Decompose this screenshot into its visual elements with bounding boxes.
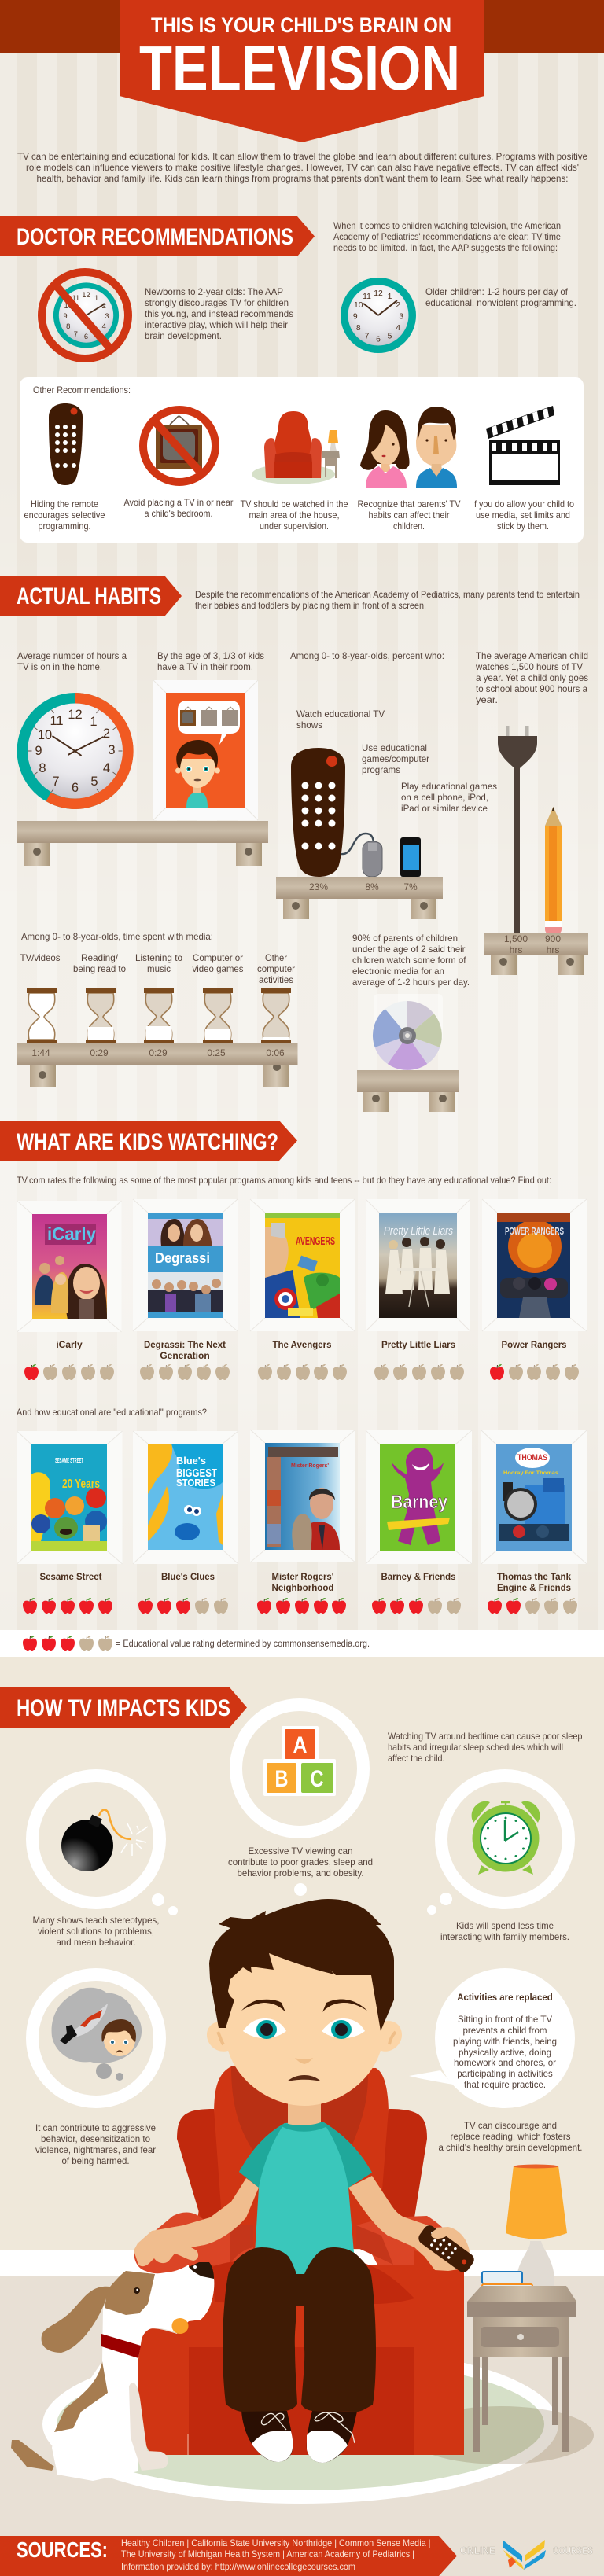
icon: clock: 12 [374,289,383,298]
text: 1500 hours: to school about 900 hours a [476,683,587,694]
bubble body: participating in activities [457,2068,553,2079]
shelf 4 with time labels: 0:25 [207,1047,226,1058]
text: excessive viewing: contribute to poor grades, sleep and [228,1857,373,1868]
text: stereotypes: Many shows teach stereotypes, [33,1915,159,1926]
text: 90 percent of parents: children watch some form of [352,955,466,966]
poster: Pretty Little Liars [366,1199,470,1331]
intro text: role models can influence viewers to make positive lifestyle changes. However, TV can can also have negative effects. TV can affect kids' [26,162,579,173]
text: excessive viewing: Excessive TV viewing can [249,1846,352,1857]
bubble body: prevents a child from [462,2025,547,2036]
poster: Degrassi: Degrassi [155,1250,210,1266]
poster: Thomas [481,1430,587,1564]
icon: crossed-out clock [42,272,128,359]
captions: use media, set limits and [476,510,570,521]
icon: crossed-out clock: 5 [94,329,98,338]
thought bubble: ABC blocks: A [293,1732,307,1758]
big clock: 6 [72,781,79,795]
big clock: 10 [38,728,52,742]
bar: phone 7 percent [400,837,421,877]
show titles row 1 [56,1339,567,1361]
text: newborns: Newborns to 2-year olds: The AAP [145,286,283,297]
text: 90 percent of parents: under the age of 2 said their [352,944,466,955]
text: educational programs: And how educational are "educational" programs? [17,1407,207,1418]
show titles row 1: Pretty Little Liars [381,1339,455,1350]
big clock: 2 [103,727,110,741]
show titles row 2: Neighborhood [272,1582,333,1593]
text: reading: a child's healthy brain development. [439,2142,582,2153]
hourglass column labels: Listening to [135,952,182,963]
apple ratings row 1 [24,1364,579,1380]
shirt [239,2122,372,2280]
fingers over remote [430,2226,451,2240]
shelf 4 with time labels: 1:44 [31,1047,50,1058]
panel heading: Other Recommendations: [33,385,131,396]
icon: parents [360,407,457,488]
text: stereotypes: violent solutions to problems, [38,1926,154,1937]
panel: other recommendations [20,377,584,543]
text: AAP recommendations: needs to be limited. In fact, the AAP suggests the following: [333,242,558,253]
hourglass: music [144,988,174,1044]
text: aggressive behavior: behavior, desensitization to [41,2133,150,2144]
heading: doctor recommendations [0,216,315,256]
hourglass column labels [20,952,295,985]
logo: online courses [460,2540,593,2570]
icon: clock: 3 [399,312,403,321]
text: watch educational TV: shows [296,719,322,730]
bubble body [453,2014,557,2090]
icon: crossed-out clock: 10 [64,301,72,310]
hourglass column labels: TV/videos [20,952,60,963]
big clock: 7 [52,775,60,789]
text: time spent with media: Among 0- to 8-year-olds, time spent with media: [21,931,213,942]
heading: actual habits: ACTUAL HABITS [17,583,161,609]
bar: power cord 1500 hours [498,726,537,933]
show titles row 2: Mister Rogers' [272,1571,334,1582]
icon: clock [341,278,416,353]
text: stereotypes: and mean behavior. [57,1937,135,1948]
icon: clock: 2 [396,301,400,310]
hourglass column labels: being read to [73,963,126,974]
bubble body: playing with friends, being [453,2036,557,2047]
text: excessive viewing: behavior problems, and obesity. [238,1868,363,1879]
text: bedtime: affect the child. [388,1753,445,1764]
text: newborns: strongly discourages TV for children [145,297,289,308]
captions: TV should be watched in the [241,499,348,510]
poster: Pretty Little Liars: Pretty Little Liars [384,1224,453,1238]
text: AAP recommendations: When it comes to children watching television, the American [333,220,561,231]
legend: apple rating [0,1630,604,1657]
hand-held remote [416,2223,477,2275]
big clock: 9 [35,744,42,758]
text: habits intro [195,589,580,611]
captions: programming. [38,521,91,532]
big clock [17,693,134,809]
big clock: 8 [39,761,46,775]
sources banner [0,2536,457,2576]
shelf 3 with hours labels: hrs [547,944,559,955]
hourglass column labels: video games [192,963,244,974]
text: educational games: programs [362,764,400,775]
big clock: 3 [108,743,116,757]
shelf 4 with time labels: 0:29 [149,1047,168,1058]
icon: remote [49,403,83,485]
intro text: health, behavior and family life. Kids can learn things from programs that parents don't want them to learn. See what really happens: [36,173,568,184]
show titles row 1: Generation [160,1350,210,1361]
text: play educational games: iPad or similar device [401,803,488,814]
poster: Thomas: THOMAS [517,1453,547,1463]
logo: online courses: COURSES [553,2545,593,2556]
text: play educational games: Play educational games [401,781,497,792]
text: percent who: Among 0- to 8-year-olds, percent who: [290,650,444,661]
shelf 4 with time labels: 0:29 [90,1047,109,1058]
arms [134,2176,470,2271]
text: popular programs: TV.com rates the following as some of the most popular programs among kids and teens -- but do they have any educational value? Find out: [17,1175,551,1186]
text: average hours: Average number of hours a [17,650,127,661]
text: aggressive behavior: of being harmed. [61,2155,129,2166]
icon: armchair in living area [252,411,340,484]
icon: clapboard [486,406,560,485]
illustration: boy on the chair [134,1899,477,2463]
speech bubble: activities are replaced [409,1968,575,2108]
text: family interaction: Kids will spend less time [456,1920,554,1931]
bar: pencil 900 hours [545,807,562,933]
lamp [506,2164,567,2294]
show titles row 1: Degrassi: The Next [144,1339,226,1350]
thought bubble: ABC blocks [236,1705,363,1896]
text: bedtime: Watching TV around bedtime can cause poor sleep [388,1731,583,1742]
illustration: side table with lamp and books [408,2164,594,2464]
sources banner: Information provided by: http://www.onlinecollegecourses.com [121,2561,355,2572]
text: newborns: interactive play, which will help their [145,319,288,330]
hourglass column labels: Reading/ [81,952,119,963]
text: AAP recommendations [333,220,561,253]
child [175,740,220,808]
hourglass: reading [86,988,116,1044]
text: family interaction: interacting with family members. [440,1931,569,1942]
text: 90 percent of parents: 90% of parents of children [352,933,458,944]
captions: If you do allow your child to [472,499,574,510]
show titles row 2: Thomas the Tank [497,1571,571,1582]
poster: The Avengers: AVENGERS [296,1235,335,1248]
speech bubble [178,701,240,745]
shelf 3 with hours labels: hrs [510,944,522,955]
icon: clock: 7 [365,333,370,341]
thought bubble: alarm clock [427,1776,569,1915]
icon: clock: 1 [388,293,392,301]
poster: Sesame Street: SESAME STREET [55,1457,83,1464]
captions: main area of the house, [249,510,340,521]
big clock: 1 [90,715,98,729]
text: reading: TV can discourage and [464,2120,557,2131]
poster: The Avengers [250,1199,355,1331]
hourglass column labels: music [147,963,171,974]
poster: Mister Rogers: Mister Rogers' [291,1463,329,1469]
rug [42,2345,558,2504]
icon: clock: 11 [363,293,371,301]
text: watch educational TV [296,708,385,730]
icon: clock: 9 [353,312,358,321]
text: 1500 hours: year. [476,694,498,705]
text: aggressive behavior [35,2122,156,2166]
heading: how TV impacts kids: HOW TV IMPACTS KIDS [17,1695,230,1721]
apple ratings row 2 [23,1598,577,1614]
text: family interaction [440,1920,569,1942]
text: watch educational TV: Watch educational TV [296,708,385,719]
show titles row 2: Sesame Street [39,1571,102,1582]
icon: crossed-out clock: 3 [105,311,109,320]
bubble body: homework and chores, or [454,2057,556,2068]
text: aggressive behavior: It can contribute to aggressive [35,2122,156,2133]
head [207,1899,402,2106]
illustration: dog [11,2262,214,2481]
icon: crossed-out clock: 11 [72,293,79,302]
text: older children: Older children: 1-2 hours per day of [425,286,569,297]
shelf 3 with hours labels: 900 [545,933,561,944]
icon: no TV [143,410,215,482]
poster: Blue's Clues [133,1431,238,1564]
text: newborns: this young, and instead recommends [145,308,293,319]
show titles row 2 [39,1571,571,1593]
big clock: 5 [90,775,98,789]
text: older children: educational, nonviolent programming. [425,297,576,308]
sources banner: Healthy Children | California State University Northridge | Common Sense Media | [121,2537,431,2548]
icon: crossed-out clock: 4 [102,322,106,330]
icon: crossed-out clock: 9 [63,311,68,320]
text: habits intro: their babies and toddlers by placing them in front of a screen. [195,600,426,611]
poster: Blue's Clues: BIGGEST [176,1466,217,1480]
poster: Blue's Clues: Blue's [176,1455,206,1466]
hourglass: TV/videos [27,988,57,1044]
text: reading [439,2120,582,2153]
text: average hours: TV is on in the home. [17,661,102,672]
thought bubble: ABC blocks: B [275,1766,288,1792]
pants and shoes [223,2247,376,2463]
text: 1500 hours: watches 1,500 hours of TV [475,661,583,672]
text: bedtime: habits and irregular sleep schedules which will [388,1742,563,1753]
icon: disc [373,994,443,1070]
text: reading: replace reading, which fosters [450,2131,571,2142]
poster: Mister Rogers [250,1430,355,1562]
poster: iCarly [17,1201,121,1332]
text: educational games [362,742,429,775]
poster: Barney: Barney [391,1492,448,1513]
illustration: armchair [134,2066,464,2455]
icon: crossed-out clock: 6 [84,332,88,340]
heading: how TV impacts kids [0,1687,247,1728]
icon: clock: 5 [388,333,392,341]
captions [24,497,574,532]
poster: Barney [366,1430,472,1564]
wall base and floor [0,2250,604,2576]
title line 2: TELEVISION [139,33,460,103]
show titles row 1: The Avengers [272,1339,332,1350]
text: 90 percent of parents: electronic media for an [352,966,444,977]
captions: stick by them. [497,521,549,532]
text: 1500 hours: a year. Yet a child only goes [476,672,588,683]
title banner [0,0,604,142]
show titles row 2: Blue's Clues [161,1571,215,1582]
text: play educational games [401,781,497,814]
heading: what are kids watching [0,1121,297,1161]
heading: doctor recommendations: DOCTOR RECOMMENDATIONS [17,224,293,250]
hourglass column labels: activities [259,974,293,985]
show titles row 1: Power Rangers [502,1339,567,1350]
show titles row 1: iCarly [56,1339,83,1350]
poster: Sesame Street: 20 Years [62,1478,100,1491]
icon: clock: 6 [376,335,381,344]
hourglass: other activities [261,988,291,1044]
sources banner: The University of Michigan Health System | American Academy of Pediatrics | [121,2548,414,2559]
shelf 2 with percent labels: 7% [403,881,418,892]
text: 1500 hours [475,650,588,705]
text: AAP recommendations: Academy of Pediatrics' recommendations are clear: TV time [333,231,561,242]
bubble body: Sitting in front of the TV [458,2014,552,2025]
text: 90 percent of parents [352,933,470,988]
icon: crossed-out clock: 8 [66,322,70,330]
text: newborns: brain development. [145,330,222,341]
text: aggressive behavior: violence, nightmares, and fear [35,2144,156,2155]
icon: crossed-out clock: 12 [82,290,90,299]
thought bubble: knife nightmare [32,1974,160,2102]
captions: children. [393,521,425,532]
captions: encourages selective [24,510,105,521]
poster: Degrassi [133,1199,238,1331]
text: TV in room: By the age of 3, 1/3 of kids [157,650,264,661]
text: TV in room: have a TV in their room. [157,661,253,672]
icon: crossed-out clock: 2 [102,301,106,310]
text: play educational games: on a cell phone, iPod, [401,792,488,803]
big clock: 12 [68,708,83,722]
logo: online courses: ONLINE [460,2545,495,2556]
poster: Power Rangers [482,1199,587,1331]
text: average hours [17,650,127,672]
shelf 1 [17,821,268,866]
text: TV in room [157,650,264,672]
shelf 2 with percent labels: 23% [309,881,328,892]
heading: what are kids watching: WHAT ARE KIDS WATCHING? [17,1129,278,1155]
poster: Blue's Clues: STORIES [176,1477,215,1489]
poster: Power Rangers: POWER RANGERS [505,1225,564,1237]
poster: Thomas: Hooray For Thomas [503,1471,559,1476]
shelf 4 with time labels [17,1043,297,1087]
text: excessive viewing [228,1846,373,1879]
thought bubble: ABC blocks: C [310,1766,324,1792]
show titles row 2: Barney & Friends [381,1571,456,1582]
captions: Avoid placing a TV in or near [124,497,233,508]
hourglass column labels: computer [257,963,295,974]
text: newborns [145,286,293,341]
neck [282,2099,327,2132]
shelf 2 with percent labels: 8% [365,881,379,892]
bar: mouse 8 percent [341,834,382,877]
bubble body: that require practice. [464,2079,546,2090]
poster: iCarly: iCarly [47,1224,96,1244]
books [482,2272,532,2296]
icon: clock: 8 [356,324,361,333]
icon: crossed-out clock: 7 [74,329,78,338]
big clock: 11 [50,714,64,728]
text: stereotypes [33,1915,159,1948]
framed picture: child with TV [153,680,258,820]
text: 1500 hours: The average American child [476,650,588,661]
hourglass column labels: Computer or [193,952,243,963]
title line 1: THIS IS YOUR CHILD'S BRAIN ON [151,13,451,37]
icon: clock: 4 [396,324,400,333]
icon: crossed-out clock: 1 [94,293,98,302]
shelf 5 [357,1070,459,1112]
heading: actual habits [0,576,182,616]
text: older children [425,286,576,308]
shelf 3 with hours labels [484,933,588,975]
shelf 2 with percent labels [276,877,443,919]
captions: Recognize that parents' TV [357,499,461,510]
text: bedtime [388,1731,583,1764]
text: educational games: games/computer [362,753,429,764]
text: 90 percent of parents: average of 1-2 hours per day. [352,977,470,988]
shelf 4 with time labels: 0:06 [266,1047,285,1058]
legend: apple rating: = Educational value rating determined by commonsensemedia.org. [116,1638,370,1649]
sources banner: SOURCES: [17,2537,108,2562]
intro text: TV can be entertaining and educational for kids. It can allow them to travel the globe and learn about different cultures. Programs with positive [17,151,587,162]
captions: under supervision. [260,521,329,532]
captions: Hiding the remote [31,499,98,510]
icon: clock: 10 [354,301,363,310]
text: educational games: Use educational [362,742,427,753]
poster: Sesame Street [17,1431,123,1564]
captions: a child's bedroom. [145,508,212,519]
hourglass: video games [203,988,233,1044]
hourglass column labels: Other [265,952,287,963]
bubble body: physically active, doing [459,2047,551,2058]
captions: habits can affect their [368,510,450,521]
thought bubble: bomb [32,1776,178,1915]
shelf 3 with hours labels: 1,500 [504,933,528,944]
bar: remote 23 percent [291,748,345,877]
big clock: 4 [103,761,110,775]
bubble heading: Activities are replaced [457,1992,553,2003]
show titles row 2: Engine & Friends [497,1582,571,1593]
intro text [17,151,587,184]
